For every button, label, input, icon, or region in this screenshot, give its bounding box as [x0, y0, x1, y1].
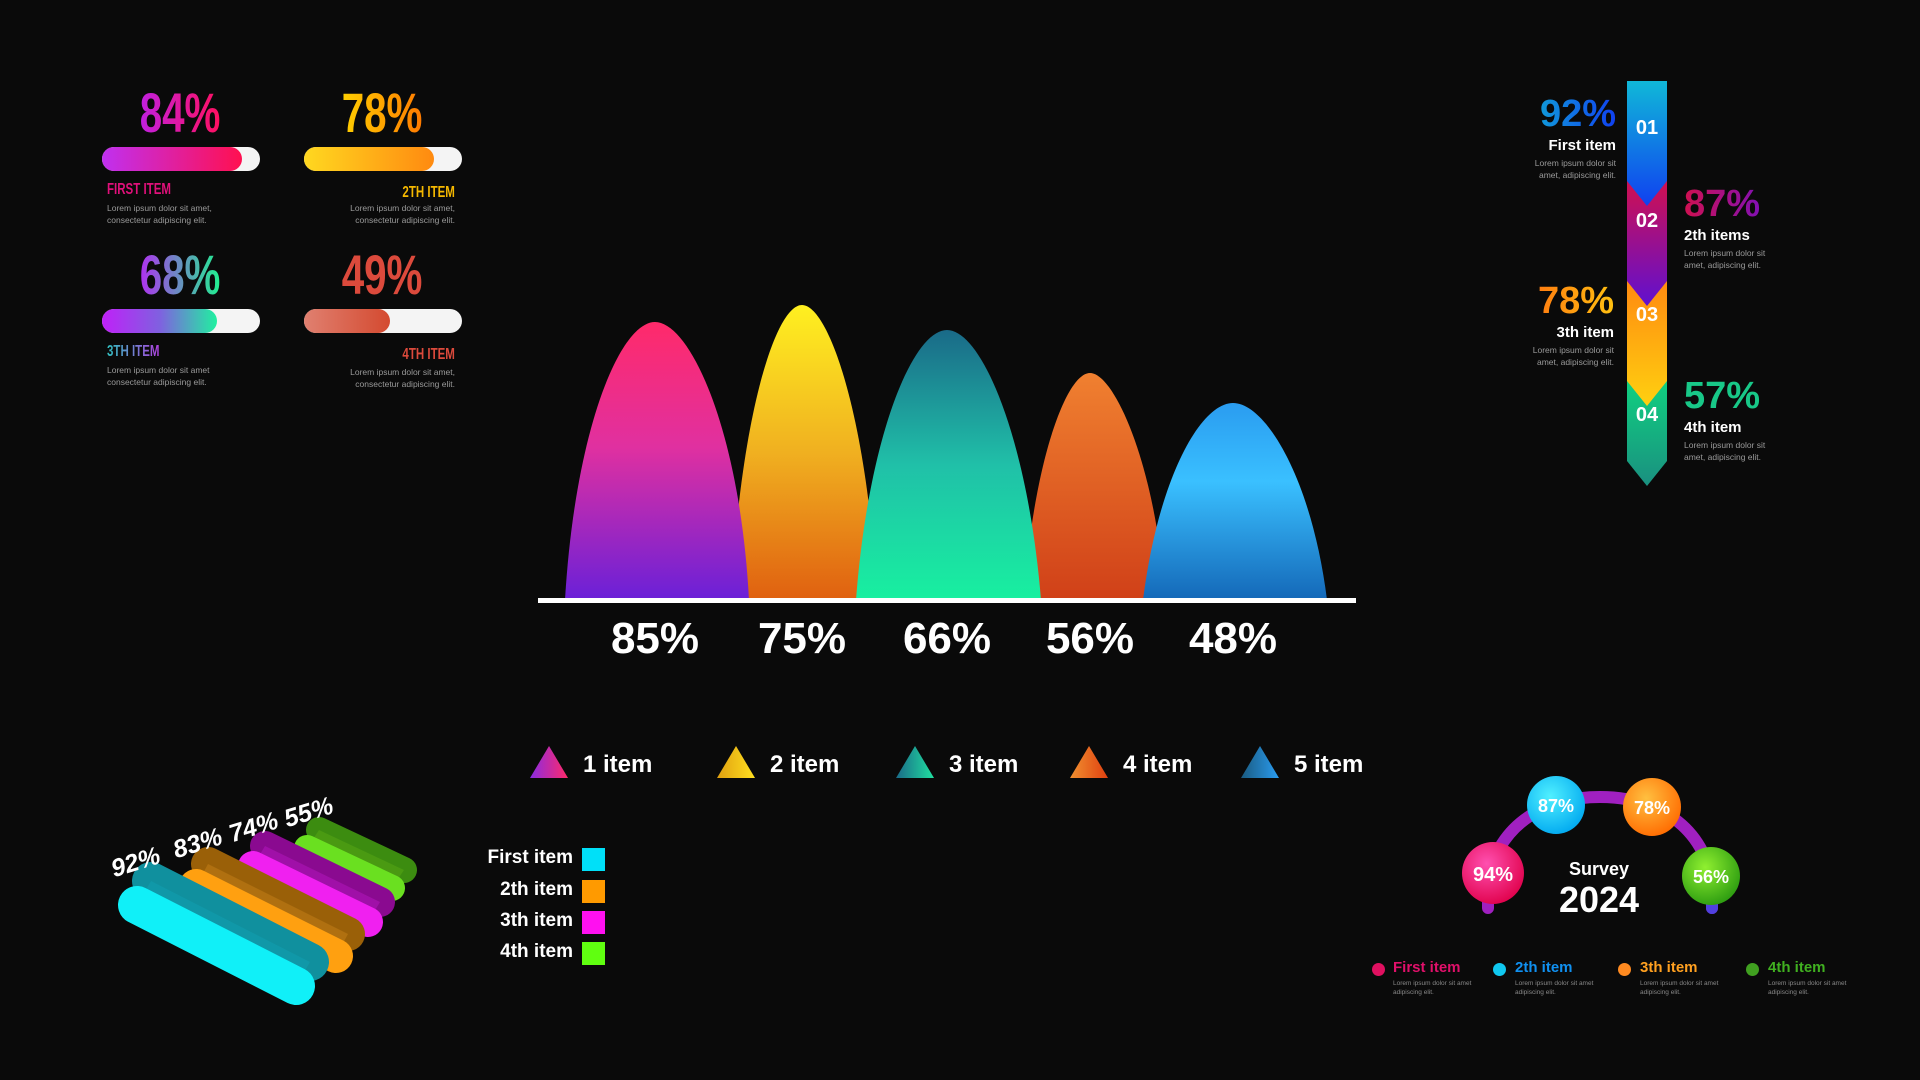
item 4: 49%	[304, 243, 462, 389]
legend: 3D bars: 4th item	[500, 941, 573, 962]
step 1: 92%: 92%	[1540, 93, 1616, 135]
percentage labels	[611, 614, 1277, 663]
baseline	[538, 598, 1356, 603]
arrow ribbon: 03	[1636, 304, 1658, 326]
item 1: 84%	[102, 81, 260, 225]
item 2: 78%: 78%	[342, 81, 422, 144]
legend: survey: First item	[1393, 959, 1461, 976]
bar 3: magenta 74%	[253, 846, 380, 922]
legend: 3D bars	[487, 847, 605, 965]
legend: survey: adipiscing elit.	[1640, 989, 1681, 996]
ball 78%: 78%	[1634, 798, 1670, 818]
ball 94%	[1462, 842, 1524, 904]
bar 2: orange 83%	[196, 864, 348, 956]
bar labels: 55%	[281, 792, 337, 833]
bar 1: cyan 92%	[137, 881, 310, 986]
survey title	[1559, 859, 1639, 920]
item 2: 78%: Lorem ipsum dolor sit amet,	[350, 203, 455, 213]
step 1: 92%: First item	[1548, 137, 1616, 154]
legend item 1	[1372, 959, 1472, 996]
percentage labels: 75%	[758, 614, 846, 663]
step 2: 87%: 2th items	[1684, 227, 1750, 244]
survey title: Survey	[1569, 859, 1629, 879]
step 2: 87%: Lorem ipsum dolor sit	[1684, 248, 1765, 258]
arc	[1488, 797, 1712, 908]
legend: survey: 3th item	[1640, 959, 1698, 976]
legend: survey: adipiscing elit.	[1515, 989, 1556, 996]
peak 3: 66%	[856, 330, 1041, 600]
item 3: 68%: 68%	[140, 243, 220, 306]
step 2: 87%	[1684, 183, 1766, 270]
legend: survey: adipiscing elit.	[1393, 989, 1434, 996]
legend: survey: 2th item	[1515, 959, 1573, 976]
peak 4: 56%	[1024, 373, 1165, 600]
peak 5: 48%	[1143, 403, 1327, 600]
step 3: 78%: 3th item	[1556, 324, 1614, 341]
legend item 4	[1746, 959, 1846, 996]
legend: survey: Lorem ipsum dolor sit amet	[1768, 980, 1846, 987]
item 4: 49%: Lorem ipsum dolor sit amet,	[350, 367, 455, 377]
legend: peaks	[530, 746, 1363, 778]
step 4: 57%: 4th item	[1684, 419, 1742, 436]
item 1: 84%: FIRST ITEM	[107, 181, 171, 198]
item 2: 78%	[304, 81, 462, 225]
bar labels: 83%	[170, 823, 226, 864]
legend: peaks: 1 item	[583, 751, 652, 778]
step 4: 57%: Lorem ipsum dolor sit	[1684, 440, 1765, 450]
step 2: 87%: 87%	[1684, 183, 1760, 225]
peak 1: 85%	[565, 322, 749, 600]
item 4: 49%: consectetur adipiscing elit.	[355, 379, 455, 389]
item 1: 84%: Lorem ipsum dolor sit amet,	[107, 203, 212, 213]
bar labels: 74%	[226, 807, 282, 848]
arrow ribbon: 01	[1636, 117, 1658, 139]
chart: 3D bars bottom-left	[108, 792, 417, 1005]
panel: survey 2024 arc	[1462, 776, 1740, 920]
item 3: 68%: 3TH ITEM	[107, 343, 159, 360]
legend: peaks: 4 item	[1123, 751, 1192, 778]
item 2: 78%: 2TH ITEM	[403, 184, 455, 201]
percentage labels: 66%	[903, 614, 991, 663]
legend: 3D bars: First item	[487, 847, 573, 868]
bar 4: green 55%	[307, 830, 404, 888]
panel: vertical arrow steps (top-right)	[1533, 81, 1766, 486]
legend: peaks: 2 item	[770, 751, 839, 778]
legend: peaks: 3 item	[949, 751, 1018, 778]
step 4: 57%	[1684, 375, 1766, 462]
item 2: 78%: consectetur adipiscing elit.	[355, 215, 455, 225]
arrow ribbon: 04	[1636, 404, 1659, 426]
percentage labels: 85%	[611, 614, 699, 663]
legend item 3	[1618, 959, 1718, 996]
item 4: 49%: 49%	[342, 243, 422, 306]
step 1: 92%	[1535, 93, 1616, 180]
percentage labels: 48%	[1189, 614, 1277, 663]
step 3: 78%: Lorem ipsum dolor sit	[1533, 345, 1614, 355]
item 3: 68%	[102, 243, 260, 387]
ball 87%: 87%	[1538, 796, 1574, 816]
panel: progress bars top-left	[102, 81, 462, 389]
step 2: 87%: amet, adipiscing elit.	[1684, 260, 1761, 270]
item 1: 84%: consectetur adipiscing elit.	[107, 215, 207, 225]
item 3: 68%: Lorem ipsum dolor sit amet	[107, 365, 210, 375]
arrow ribbon: 02	[1636, 210, 1658, 232]
step 4: 57%: amet, adipiscing elit.	[1684, 452, 1761, 462]
peak 2: 75%	[731, 305, 877, 600]
step 3: 78%: amet, adipiscing elit.	[1537, 357, 1614, 367]
legend: survey: Lorem ipsum dolor sit amet	[1515, 980, 1593, 987]
ball 56%: 56%	[1693, 867, 1729, 887]
item 4: 49%: 4TH ITEM	[403, 346, 455, 363]
item 1: 84%: 84%	[140, 81, 220, 144]
bar labels: 92%	[108, 842, 164, 883]
item 3: 68%: consectetur adipiscing elit.	[107, 377, 207, 387]
legend item 2	[1493, 959, 1594, 996]
survey title: 2024	[1559, 879, 1639, 920]
step 1: 92%: Lorem ipsum dolor sit	[1535, 158, 1616, 168]
legend: peaks: 5 item	[1294, 751, 1363, 778]
arrow ribbon	[1627, 81, 1667, 486]
legend: survey: Lorem ipsum dolor sit amet	[1640, 980, 1718, 987]
bar labels	[108, 792, 337, 883]
legend: survey	[1372, 959, 1846, 996]
legend: survey: Lorem ipsum dolor sit amet	[1393, 980, 1471, 987]
ball 56%	[1682, 847, 1740, 905]
ball 87%	[1527, 776, 1585, 834]
step 4: 57%: 57%	[1684, 375, 1760, 417]
step 3: 78%	[1533, 280, 1614, 367]
legend: 3D bars: 2th item	[500, 879, 573, 900]
ball 78%	[1623, 778, 1681, 836]
step 3: 78%: 78%	[1538, 280, 1614, 322]
legend: survey: adipiscing elit.	[1768, 989, 1809, 996]
legend: 3D bars: 3th item	[500, 910, 573, 931]
step 1: 92%: amet, adipiscing elit.	[1539, 170, 1616, 180]
percentage labels: 56%	[1046, 614, 1134, 663]
legend: survey: 4th item	[1768, 959, 1826, 976]
ball 94%: 94%	[1473, 864, 1513, 886]
